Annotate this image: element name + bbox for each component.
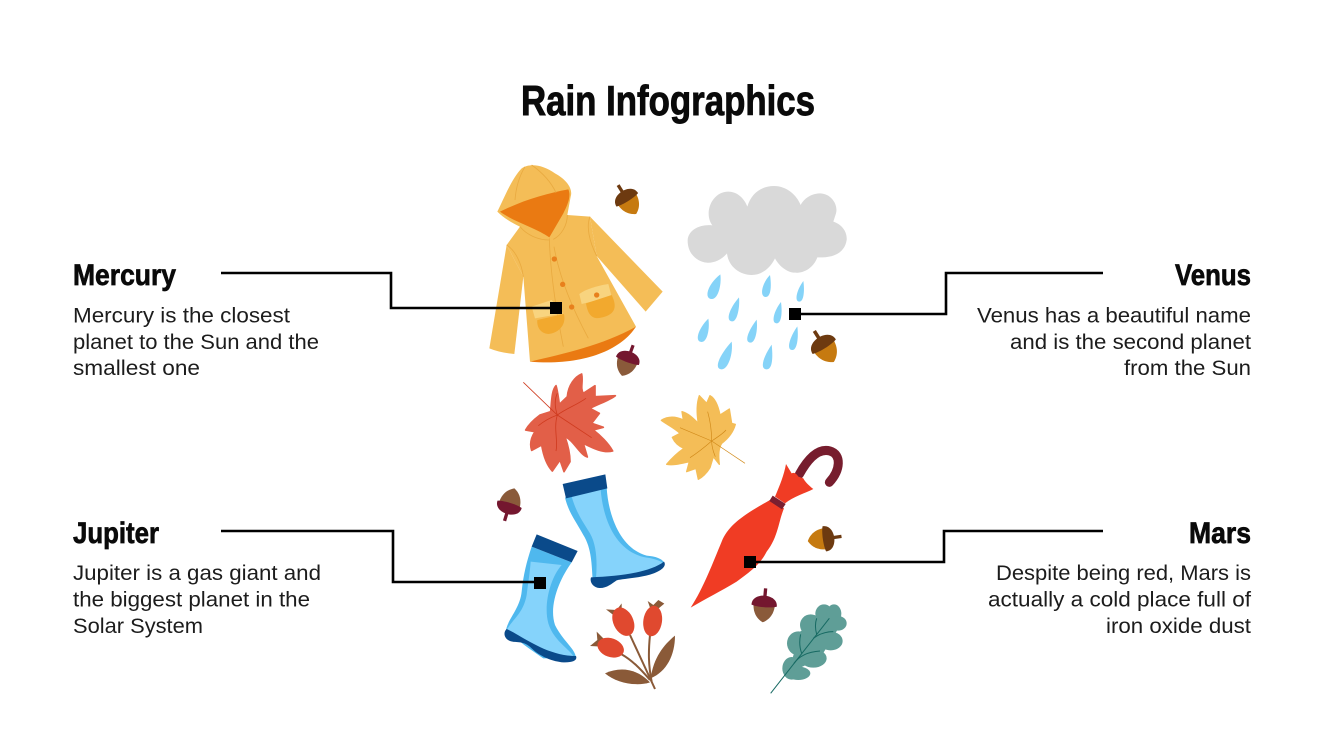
heading: Venus: Venus [1175, 259, 1251, 292]
icon: acorn right of rain [803, 324, 845, 369]
heading: Jupiter: Jupiter [73, 517, 159, 550]
connector: Mars to umbrella [744, 531, 1103, 568]
text block: Venus description [977, 304, 1251, 380]
illustration: rain boots [504, 474, 665, 662]
text block: Venus description: and is the second planet [1010, 331, 1251, 354]
text block: Mars description: actually a cold place full of [988, 588, 1251, 612]
title: Rain Infographics [521, 77, 815, 124]
text block: Venus description: from the Sun [1124, 357, 1251, 380]
icon: acorn right of umbrella [806, 524, 843, 554]
text block: Jupiter description: Jupiter is a gas giant and [73, 562, 321, 585]
illustration: oak leaf [771, 604, 847, 693]
illustration: rain cloud [688, 186, 847, 369]
text block: Jupiter description [73, 562, 321, 638]
illustration: rosehip branch [590, 600, 675, 689]
connector: Jupiter to boots [221, 531, 546, 589]
text block: Venus description: Venus has a beautiful name [977, 304, 1251, 328]
text block: Mars description [988, 562, 1251, 638]
text block: Mercury description: Mercury is the closest [73, 304, 290, 328]
connector: Venus to rain [789, 273, 1103, 320]
illustration: yellow maple leaf [661, 396, 745, 479]
illustration: red maple leaf [523, 374, 615, 472]
text block: Jupiter description: Solar System [73, 615, 203, 638]
panel: Mars [744, 517, 1251, 638]
heading: Mercury: Mercury [73, 259, 176, 292]
text block: Mercury description: planet to the Sun and the [73, 331, 319, 354]
icon: acorn left of boots [492, 485, 527, 525]
illustration: raincoat [489, 165, 663, 362]
icon: acorn below umbrella [750, 587, 778, 623]
panel: Jupiter [73, 517, 546, 638]
text block: Mercury description: smallest one [73, 357, 200, 380]
connector: Mercury to raincoat [221, 273, 562, 314]
text block: Jupiter description: the biggest planet in the [73, 588, 310, 612]
icon: acorn top [607, 178, 647, 221]
text block: Mars description: Despite being red, Mars is [996, 562, 1251, 585]
heading: Mars: Mars [1189, 517, 1251, 550]
illustration: closed umbrella [691, 450, 838, 608]
icon: acorn under coat [611, 341, 645, 380]
text block: Mars description: iron oxide dust [1106, 615, 1251, 638]
panel: Venus [789, 259, 1251, 380]
text block: Mercury description [73, 304, 319, 380]
panel: Mercury [73, 259, 562, 380]
